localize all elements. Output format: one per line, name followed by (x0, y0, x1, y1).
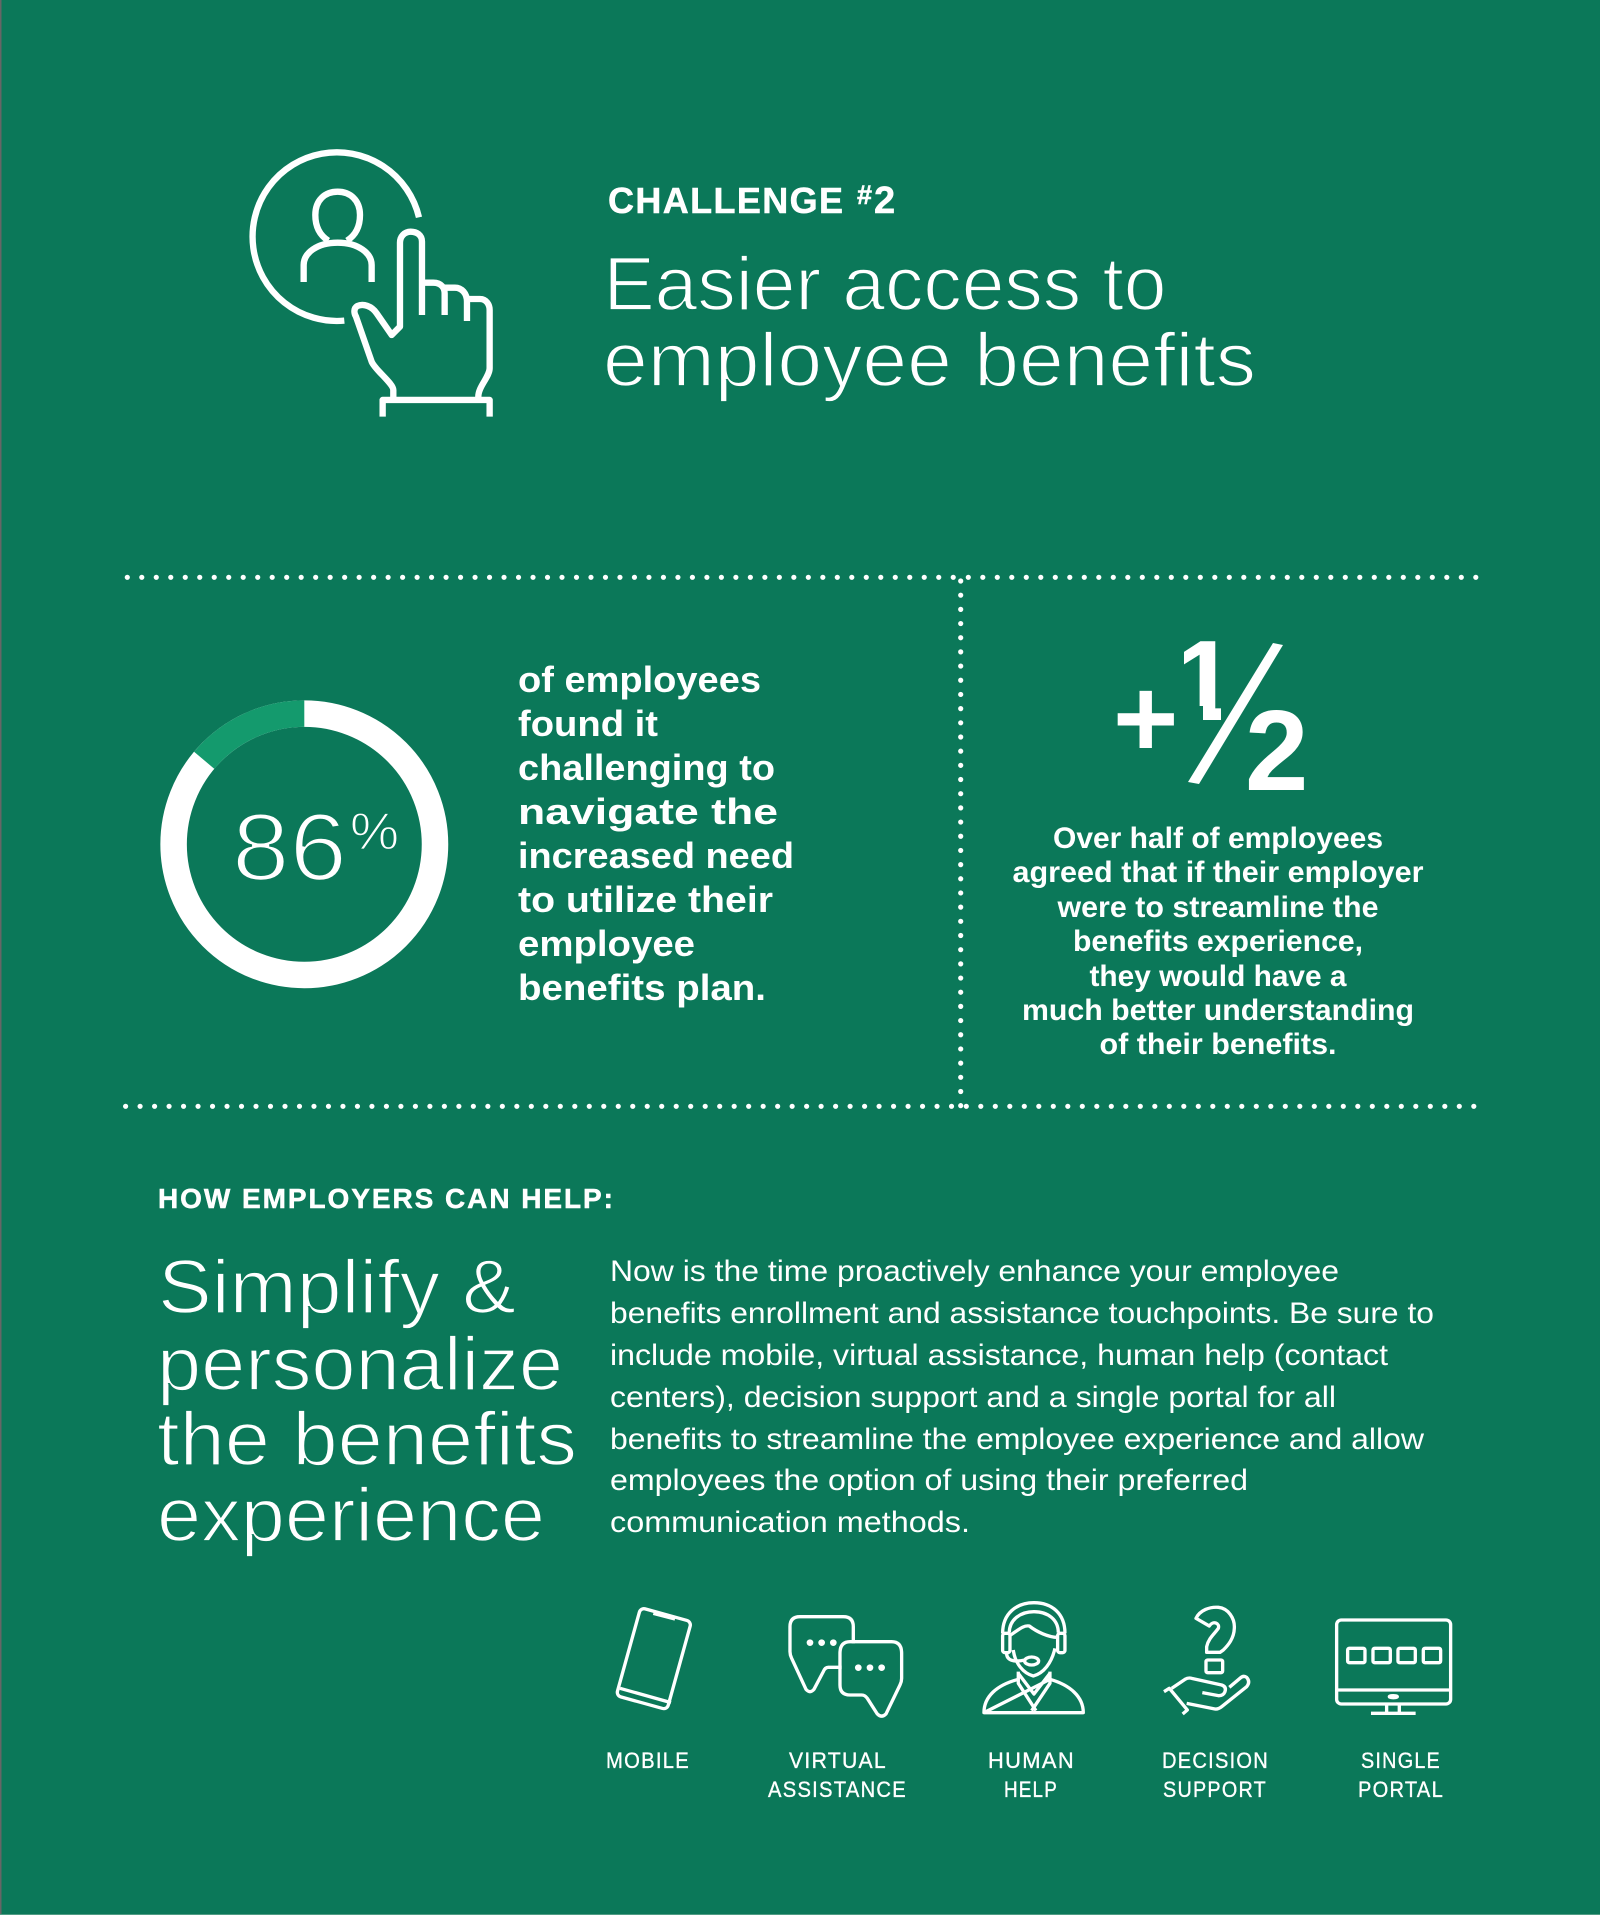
text block: recommendations: benefits enrollment and assistance touchpoints. Be sure to (610, 1297, 1434, 1330)
stat: plus one half: 2 (1245, 688, 1308, 815)
icon: decision support (1164, 1607, 1249, 1714)
text block: recommendations: communication methods. (610, 1506, 970, 1539)
text block: over half of employees: of their benefits. (1100, 1028, 1336, 1061)
icon: mobile (616, 1608, 691, 1710)
text block: over half of employees: agreed that if their employer (1012, 856, 1424, 889)
stat: plus one half (1118, 641, 1304, 790)
heading: simplify and personalize: the benefits (157, 1397, 577, 1482)
title: employee benefits (603, 318, 1256, 403)
labels: icon captions: DECISION (1162, 1748, 1269, 1773)
labels: icon captions: ASSISTANCE (768, 1777, 907, 1802)
title: Easier access to (604, 242, 1166, 327)
heading: simplify and personalize: Simplify & (158, 1245, 516, 1330)
labels: icon captions: MOBILE (606, 1748, 690, 1773)
text block: recommendations (610, 1255, 1434, 1539)
labels: icon captions: HUMAN (988, 1748, 1075, 1773)
labels: icon captions: SUPPORT (1163, 1777, 1267, 1802)
text block: over half of employees: they would have a (1090, 960, 1347, 993)
text block: 86 percent description: navigate the (518, 791, 778, 832)
text block: over half of employees: were to streamline the (1056, 891, 1378, 924)
labels: icon captions (606, 1748, 1444, 1802)
heading: challenge number: CHALLENGE (608, 180, 843, 221)
heading: challenge number: # (857, 180, 872, 210)
stat: plus one half: + (1113, 656, 1178, 781)
text block: 86 percent description: employee (518, 923, 695, 964)
text block: over half of employees: Over half of employees (1053, 822, 1383, 855)
labels: icon captions: PORTAL (1358, 1777, 1444, 1802)
text block: recommendations: benefits to streamline the employee experience and allow (610, 1423, 1424, 1456)
text block: 86 percent description: challenging to (518, 747, 775, 788)
heading: simplify and personalize: personalize (157, 1322, 563, 1407)
icon: single portal (1337, 1620, 1451, 1713)
icon: virtual assistance (790, 1617, 902, 1716)
text block: 86 percent description: of employees (518, 659, 761, 700)
donut value: 86 (232, 794, 347, 901)
text block: 86 percent description: found it (518, 703, 658, 744)
icon: pointing hand on user circle (253, 152, 490, 417)
labels: icon captions: SINGLE (1361, 1748, 1441, 1773)
text block: 86 percent description: to utilize their (518, 879, 773, 920)
labels: icon captions: HELP (1004, 1777, 1058, 1802)
text block: 86 percent description (518, 659, 794, 1008)
text block: over half of employees (1012, 822, 1424, 1061)
labels: icon captions: VIRTUAL (789, 1748, 887, 1773)
text block: over half of employees: much better understanding (1022, 994, 1414, 1027)
text block: recommendations: employees the option of using their preferred (610, 1464, 1248, 1497)
title (603, 242, 1256, 403)
donut chart: 86 percent (174, 714, 435, 975)
text block: recommendations: include mobile, virtual assistance, human help (contact (610, 1339, 1389, 1372)
text block: recommendations: centers), decision support and a single portal for all (610, 1381, 1336, 1414)
fraction slash (1188, 643, 1283, 784)
text block: recommendations: Now is the time proactively enhance your employee (610, 1255, 1339, 1288)
section label: HOW EMPLOYERS CAN HELP: (158, 1183, 613, 1214)
stat: plus one half: 1 (1173, 618, 1236, 745)
text block: over half of employees: benefits experience, (1073, 925, 1363, 958)
text block: 86 percent description: increased need (518, 835, 794, 876)
icon: human help (984, 1603, 1083, 1713)
percent sign: % (350, 803, 399, 861)
heading: challenge number: 2 (874, 180, 895, 222)
heading: simplify and personalize (157, 1245, 577, 1558)
heading: simplify and personalize: experience (157, 1473, 545, 1558)
text block: 86 percent description: benefits plan. (518, 967, 766, 1008)
